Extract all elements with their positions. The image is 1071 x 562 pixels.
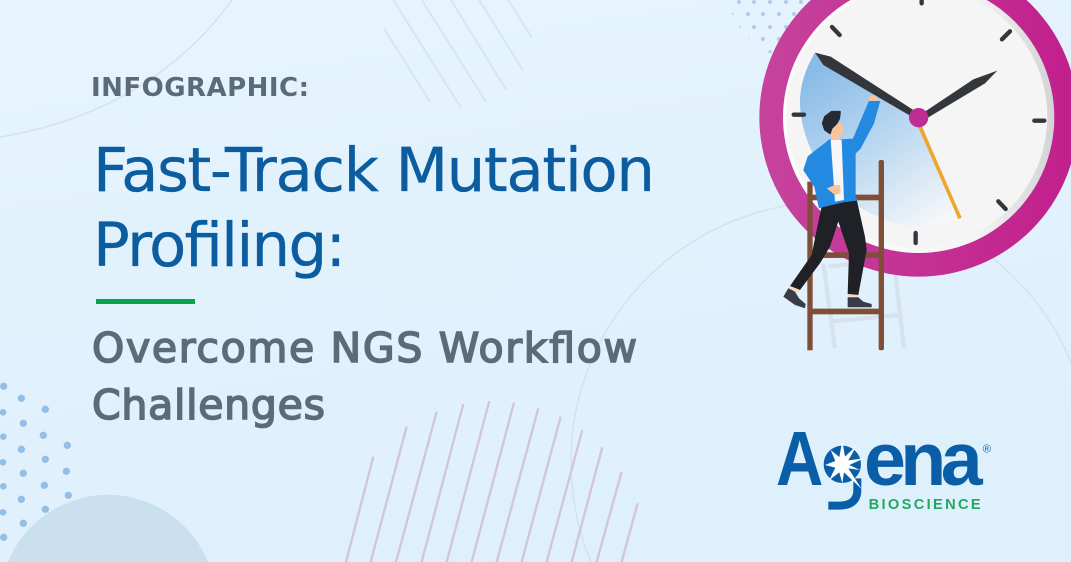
neck and face — [831, 120, 844, 140]
hair — [823, 112, 840, 133]
dot pattern: left — [0, 383, 72, 541]
man — [783, 95, 879, 308]
clock tick marks — [794, 1, 1044, 243]
clock ring — [759, 0, 1071, 277]
background arc: top left — [0, 0, 232, 137]
shirt — [831, 139, 844, 202]
subtitle: Challenges — [92, 381, 325, 429]
logo star g — [824, 441, 864, 506]
logo wordmark: ena: ena — [864, 417, 984, 501]
trousers — [790, 199, 867, 295]
ladder shadow — [823, 207, 904, 348]
main title: Fast-Track Mutation — [93, 135, 655, 206]
green divider — [96, 299, 195, 304]
shoes — [783, 288, 806, 308]
registered mark: ® — [983, 443, 992, 455]
blue sweep wedge — [800, 53, 960, 228]
second hand — [920, 127, 960, 218]
eyebrow heading: INFOGRAPHIC: — [91, 73, 309, 103]
subtitle — [92, 324, 637, 429]
background circle outline: right — [571, 202, 1071, 562]
waist hand — [827, 185, 841, 195]
illustration: clock and climbing man — [759, 0, 1071, 350]
clock hub — [909, 108, 928, 127]
minute hand — [925, 71, 997, 117]
dot pattern: top right — [732, 0, 803, 53]
logo wordmark: A: A — [776, 417, 823, 502]
clock face — [783, 0, 1054, 253]
ladder — [807, 160, 884, 350]
Agena Bioscience logo — [776, 417, 992, 513]
ankles — [789, 286, 858, 297]
diagonal lines: top — [384, 0, 532, 107]
diagonal lines: bottom — [346, 401, 638, 562]
BIOSCIENCE: BIOSCIENCE — [869, 497, 981, 513]
raised hand — [869, 95, 879, 102]
main title — [93, 135, 655, 281]
main title: Profiling: — [93, 210, 346, 281]
semicircle: bottom left — [8, 495, 208, 562]
jacket — [804, 102, 879, 207]
subtitle: Overcome NGS Workflow — [92, 324, 637, 372]
hour hand — [815, 53, 913, 117]
